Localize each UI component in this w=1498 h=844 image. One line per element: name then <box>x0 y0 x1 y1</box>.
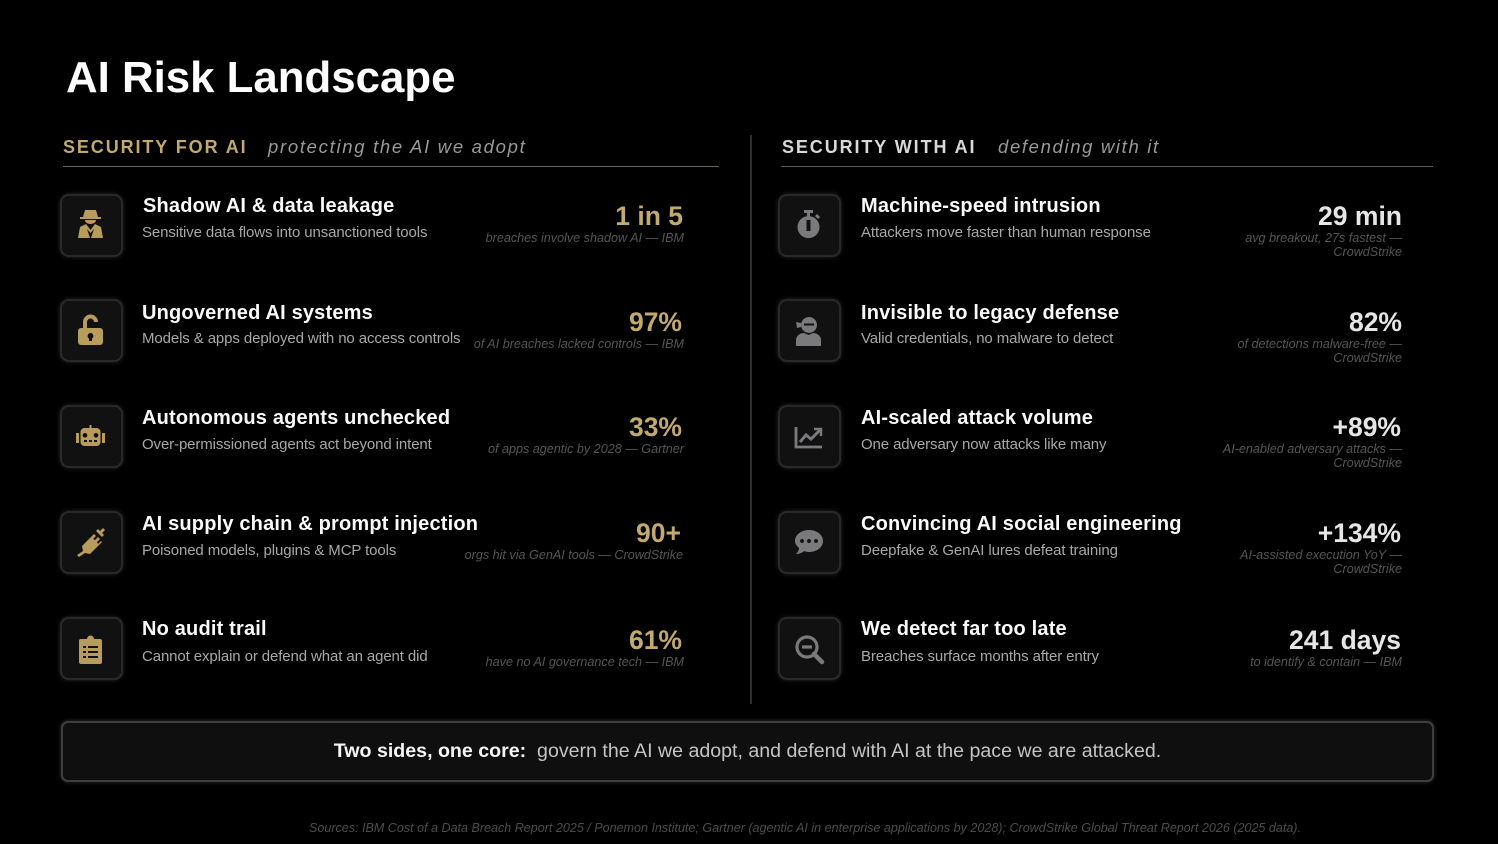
stat caption: orgs hit via GenAI tools — CrowdStrike <box>465 548 683 562</box>
title text: Autonomous agents unchecked <box>142 407 450 429</box>
row: supply chain <box>58 510 683 576</box>
heading: security with AI: SECURITY WITH AI <box>782 137 976 157</box>
stat caption: AI-assisted execution YoY — <box>1240 548 1402 562</box>
callout <box>61 721 1434 782</box>
title text: Shadow AI & data leakage <box>143 195 394 217</box>
heading: security for AI <box>63 135 719 167</box>
icon: stopwatch <box>778 194 841 257</box>
stat caption: CrowdStrike <box>1333 456 1402 470</box>
icon: magnifier <box>778 617 841 680</box>
stat: 241 days <box>1289 625 1401 655</box>
description: Breaches surface months after entry <box>861 648 1099 665</box>
icon: chat bubble <box>778 511 841 574</box>
title text: Ungoverned AI systems <box>142 302 373 324</box>
stat: +89% <box>1332 412 1401 442</box>
stat caption: of detections malware-free — <box>1238 337 1402 351</box>
stat caption: breaches involve shadow AI — IBM <box>486 231 684 245</box>
heading: security for AI: SECURITY FOR AI <box>63 137 248 157</box>
stat caption: of apps agentic by 2028 — Gartner <box>488 442 684 456</box>
description: Cannot explain or defend what an agent did <box>142 648 428 665</box>
stat: 97% <box>629 307 682 337</box>
icon: area chart <box>778 405 841 468</box>
row: autonomous agents <box>58 404 684 470</box>
panel: security for AI <box>58 136 719 682</box>
panel: security with AI <box>776 136 1433 682</box>
stat caption: to identify & contain — IBM <box>1250 655 1402 669</box>
title text: Convincing AI social engineering <box>861 513 1182 535</box>
icon: clipboard <box>60 617 123 680</box>
row: detect too late <box>776 616 1402 682</box>
heading: security for AI: protecting the AI we adopt <box>268 136 526 157</box>
stat: 82% <box>1349 307 1402 337</box>
stat caption: of AI breaches lacked controls — IBM <box>474 337 684 351</box>
row: audit trail <box>58 616 684 682</box>
row: social engineering <box>776 510 1402 576</box>
stat: 61% <box>629 625 682 655</box>
title text: No audit trail <box>142 618 267 640</box>
title text: Invisible to legacy defense <box>861 302 1119 324</box>
stat caption: have no AI governance tech — IBM <box>486 655 684 669</box>
stat: 29 min <box>1318 201 1402 231</box>
icon: robot <box>60 405 123 468</box>
description: Deepfake & GenAI lures defeat training <box>861 542 1118 559</box>
title text: We detect far too late <box>861 618 1067 640</box>
stat caption <box>1245 231 1402 259</box>
title text: Machine-speed intrusion <box>861 195 1101 217</box>
row: invisible <box>776 298 1402 365</box>
row: attack volume <box>776 404 1402 470</box>
stat: 90+ <box>636 518 681 548</box>
title text: AI supply chain & prompt injection <box>142 513 478 535</box>
description: Sensitive data flows into unsanctioned tools <box>142 224 427 241</box>
description: Valid credentials, no malware to detect <box>861 330 1113 347</box>
stat caption: AI-enabled adversary attacks — <box>1223 442 1402 456</box>
stat caption: CrowdStrike <box>1333 245 1402 259</box>
icon: syringe <box>60 511 123 574</box>
stat: 1 in 5 <box>615 201 683 231</box>
description: Poisoned models, plugins & MCP tools <box>142 542 396 559</box>
stat caption <box>1222 442 1402 470</box>
sources footer: Sources: IBM Cost of a Data Breach Report 2025 / Ponemon Institute; Gartner (agentic AI in enterprise applications by 2028); CrowdStrike Global Threat Report 2026 (2025 data). <box>309 821 1301 835</box>
center divider <box>750 135 752 704</box>
row: shadow AI <box>58 192 684 258</box>
stat caption: CrowdStrike <box>1333 351 1402 365</box>
callout: Two sides, one core: govern the AI we adopt, and defend with AI at the pace we are attacked. <box>334 740 1161 762</box>
icon: masked user <box>778 299 841 362</box>
stat: 33% <box>629 412 682 442</box>
stat caption <box>1240 548 1402 576</box>
stat caption <box>1238 337 1402 365</box>
row: machine-speed <box>776 192 1402 259</box>
description: One adversary now attacks like many <box>861 436 1106 453</box>
stat caption: CrowdStrike <box>1333 562 1402 576</box>
title: AI Risk Landscape <box>66 53 455 102</box>
description: Models & apps deployed with no access controls <box>142 330 460 347</box>
title text: AI-scaled attack volume <box>861 407 1093 429</box>
row: ungoverned AI <box>58 298 684 364</box>
icon: spy <box>60 194 123 257</box>
heading: security with AI <box>781 135 1433 167</box>
stat: +134% <box>1318 518 1401 548</box>
stat caption: avg breakout, 27s fastest — <box>1245 231 1402 245</box>
description: Attackers move faster than human response <box>861 224 1151 241</box>
description: Over-permissioned agents act beyond intent <box>142 436 432 453</box>
heading: security with AI: defending with it <box>998 136 1160 157</box>
icon: open lock <box>60 299 123 362</box>
